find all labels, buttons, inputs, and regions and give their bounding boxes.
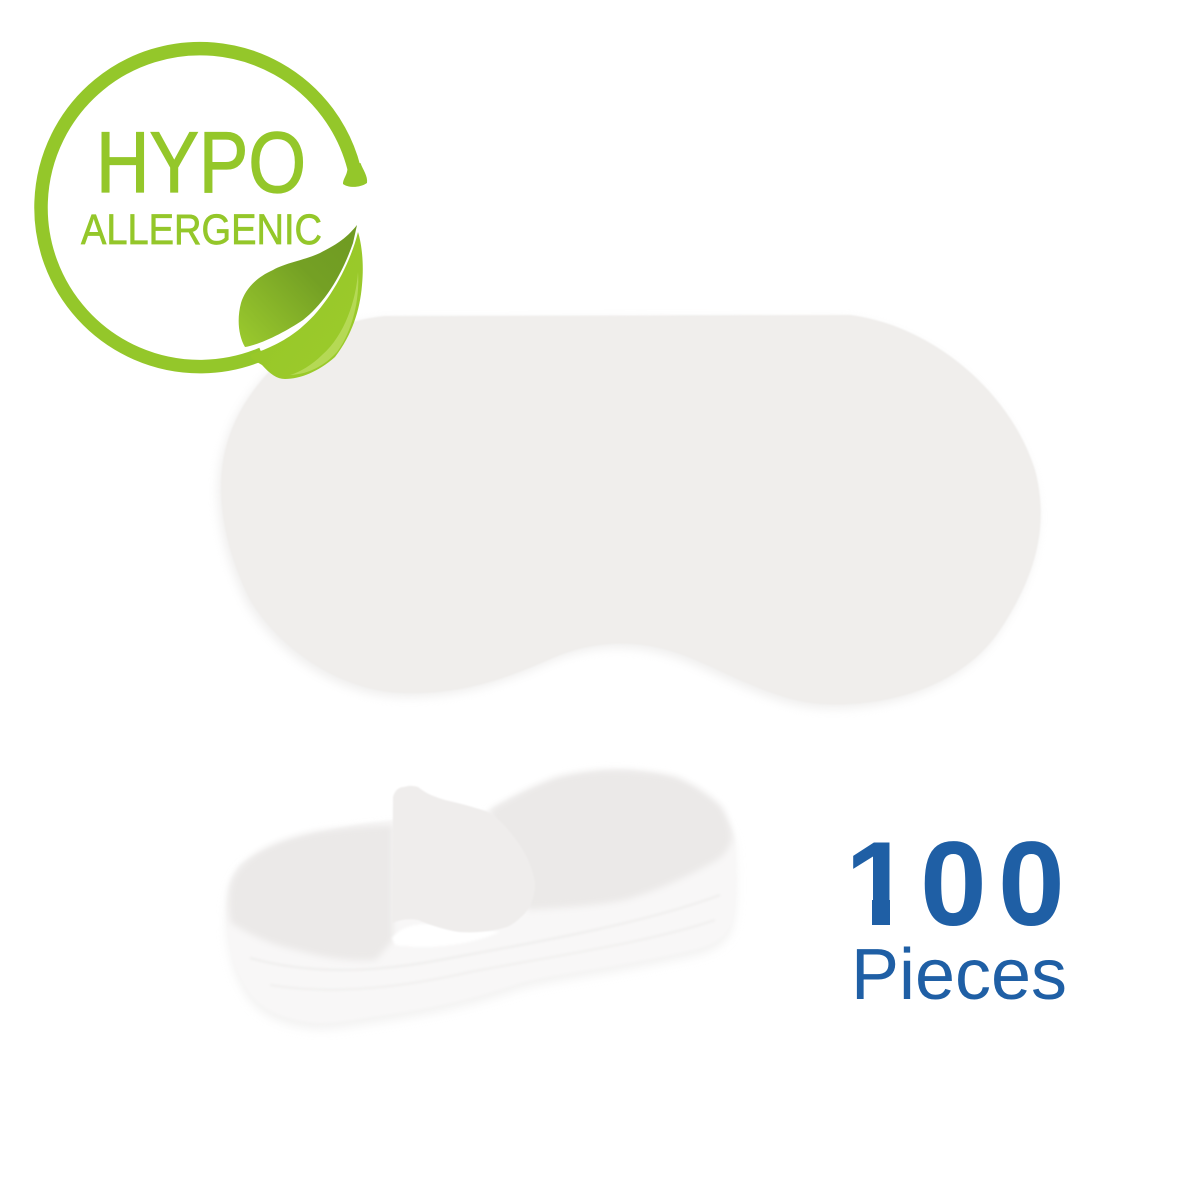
icon: leaf [239,225,363,379]
badge: hypoallergenic [41,49,367,379]
left surface [229,825,393,961]
badge ring [41,49,354,367]
product: large eye pad [218,315,1041,709]
product: stack of eye pads [227,770,736,1029]
badge text: ALLERGENIC: ALLERGENIC [81,206,322,254]
layer lines [250,895,720,970]
quantity label: Pieces: Pieces [851,935,1067,1015]
badge text: HYPO: HYPO [96,115,306,211]
flap [392,786,535,932]
stack side [227,770,736,1023]
ring droplet end [343,163,367,187]
white hollow under flap [392,924,500,947]
right surface [490,770,732,910]
quantity: 100: 100 [845,817,1065,951]
